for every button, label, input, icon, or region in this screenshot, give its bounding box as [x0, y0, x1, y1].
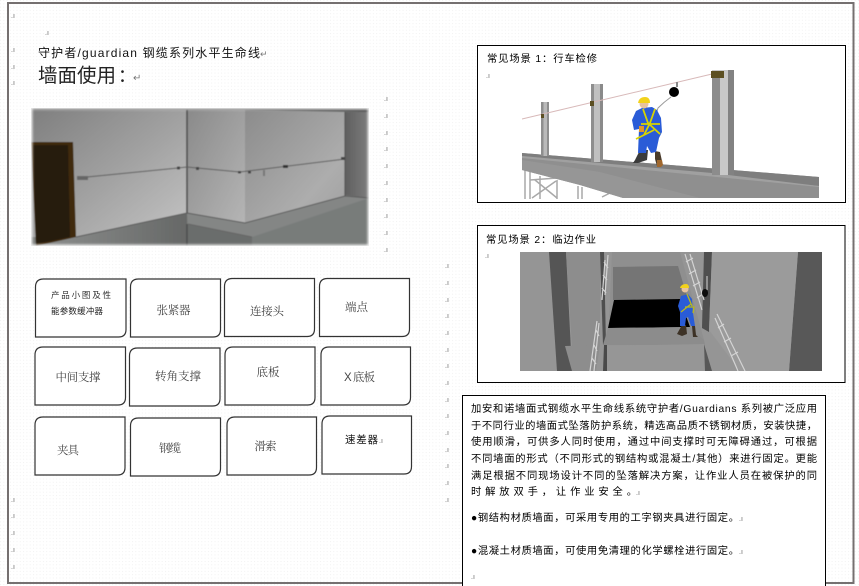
product grid	[35, 278, 412, 476]
column 3	[712, 70, 734, 175]
paragraph marks: .ı	[45, 30, 49, 37]
lifeline cable	[522, 74, 712, 119]
paragraph marks: .ı	[11, 47, 15, 54]
product card: base plate: 底板	[256, 365, 280, 379]
description paragraph: 时解放双手，让作业安全。	[471, 485, 637, 498]
column 1	[541, 102, 549, 156]
paragraph marks: .ı	[384, 130, 388, 137]
paragraph marks: .ı	[384, 96, 388, 103]
paragraph marks: .ı	[11, 80, 15, 87]
runway beam	[522, 153, 819, 198]
paragraph marks: .ı	[739, 549, 743, 556]
product card: buffer: 能参数缓冲器	[51, 306, 103, 316]
paragraph marks: .ı	[445, 330, 449, 337]
panel: description	[462, 396, 826, 586]
scene 1 heading: 常见场景 1：行车检修	[487, 52, 597, 65]
product card: middle support: 中间支撑	[56, 370, 101, 384]
paragraph marks: .ı	[11, 497, 15, 504]
product card: clamp: 夹具	[57, 443, 80, 457]
paragraph marks: .ı	[445, 263, 449, 270]
paragraph marks: .ı	[445, 480, 449, 487]
truss supports	[525, 170, 612, 199]
product card: steel cable	[130, 418, 220, 476]
return mark: ↵	[260, 49, 268, 59]
worker	[677, 284, 698, 337]
product card: speed limiter	[322, 416, 412, 474]
paragraph mark: .ı	[485, 253, 489, 260]
paragraph marks: .ı	[11, 547, 15, 554]
guard rails	[590, 254, 745, 371]
scene 2 heading: 常见场景 2：临边作业	[486, 233, 596, 246]
paragraph marks: .ı	[445, 280, 449, 287]
product card: speed limiter: 速差器	[345, 433, 378, 446]
subtitle: 守护者/guardian 钢缆系列水平生命线	[38, 45, 260, 60]
scene 1 illustration	[522, 70, 819, 199]
product card: X base plate	[321, 347, 410, 405]
product card: tensioner: 张紧器	[156, 303, 191, 317]
paragraph marks: .ı	[384, 113, 388, 120]
heading: 墙面使用	[38, 65, 116, 87]
paragraph marks: .ı	[384, 163, 388, 170]
cable brackets	[541, 71, 724, 118]
paragraph marks: .ı	[445, 413, 449, 420]
self-retracting lifeline	[702, 276, 708, 297]
description paragraph: 加安和诺墙面式钢缆水平生命线系统守护者/Guardians 系列被广泛应用	[471, 402, 817, 415]
bullet: concrete walls: ●混凝土材质墙面，可使用免清理的化学螺栓进行固定。	[471, 544, 739, 557]
product card: steel cable: 钢缆	[159, 441, 182, 455]
paragraph marks: .ı	[384, 146, 388, 153]
paragraph marks: .ı	[445, 497, 449, 504]
paragraph marks: .ı	[445, 313, 449, 320]
paragraph marks: .ı	[11, 513, 15, 520]
paragraph marks: .ı	[445, 463, 449, 470]
wall photo soft edge	[31, 108, 369, 246]
paragraph marks: .ı	[445, 380, 449, 387]
paragraph marks: .ı	[384, 197, 388, 204]
bullet: steel walls: ●钢结构材质墙面，可采用专用的工字钢夹具进行固定。	[471, 511, 739, 524]
product card: buffer: 产品小图及性	[51, 290, 111, 300]
product card: end point: 端点	[345, 300, 368, 314]
panel: scene 2	[478, 226, 845, 382]
product card: base plate	[225, 347, 315, 405]
description paragraph: 于不同行业的墙面式坠落防护系统，精选高品质不锈钢材质，安装快捷，	[471, 419, 817, 432]
paragraph marks: .ı	[445, 447, 449, 454]
scene 2 illustration	[520, 252, 822, 371]
paragraph marks: .ı	[471, 574, 475, 581]
description paragraph	[471, 402, 817, 498]
wall photo	[31, 108, 369, 246]
product card: slider: 滑索	[254, 439, 277, 453]
product card: buffer	[36, 279, 126, 337]
description paragraph: 使用顺滑，可供多人同时使用，通过中间支撑时可无障碍通过，可根据	[471, 435, 817, 448]
paragraph marks: .ı	[739, 516, 743, 523]
steel cable	[77, 157, 345, 180]
door	[31, 142, 76, 246]
description paragraph: 满足根据不同现场设计不同的坠落解决方案，让作业人员在被保护的同	[471, 469, 817, 482]
heading: ：	[118, 66, 136, 86]
paragraph marks: .ı	[384, 230, 388, 237]
product card: speed limiter: .ı	[379, 438, 383, 445]
product card: clamp	[35, 417, 125, 475]
paragraph marks: .ı	[636, 490, 640, 497]
paragraph marks: .ı	[445, 297, 449, 304]
self-retracting lifeline	[656, 82, 679, 111]
description paragraph: 不同墙面的形式（不同形式的钢结构或混凝土/其他）来进行固定。更能	[471, 452, 817, 465]
paragraph marks: .ı	[445, 430, 449, 437]
paragraph marks: .ı	[384, 213, 388, 220]
product card: end point	[320, 278, 410, 336]
paragraph marks	[471, 490, 743, 581]
paragraph marks: .ı	[445, 397, 449, 404]
paragraph marks: .ı	[384, 247, 388, 254]
panel: scene 1	[478, 46, 846, 202]
paragraph mark: .ı	[486, 73, 490, 80]
product card: X base plate: X 底板	[344, 370, 376, 384]
paragraph marks: .ı	[445, 363, 449, 370]
paragraph marks: .ı	[11, 564, 15, 571]
product card: connector: 连接头	[250, 304, 284, 318]
product card: middle support	[35, 347, 126, 405]
worker	[632, 97, 663, 167]
paragraph marks: .ı	[445, 347, 449, 354]
return mark: ↵	[133, 73, 141, 84]
product card: tensioner	[130, 279, 220, 337]
paragraph marks: .ı	[11, 64, 15, 71]
product card: slider	[227, 417, 316, 475]
product card: corner support	[130, 348, 220, 406]
product card: connector	[224, 278, 314, 336]
paragraph marks: .ı	[11, 13, 15, 20]
paragraph marks	[11, 13, 449, 571]
paragraph marks: .ı	[11, 530, 15, 537]
column 2	[591, 84, 603, 162]
paragraph marks: .ı	[384, 180, 388, 187]
product card: corner support: 转角支撑	[155, 369, 202, 383]
